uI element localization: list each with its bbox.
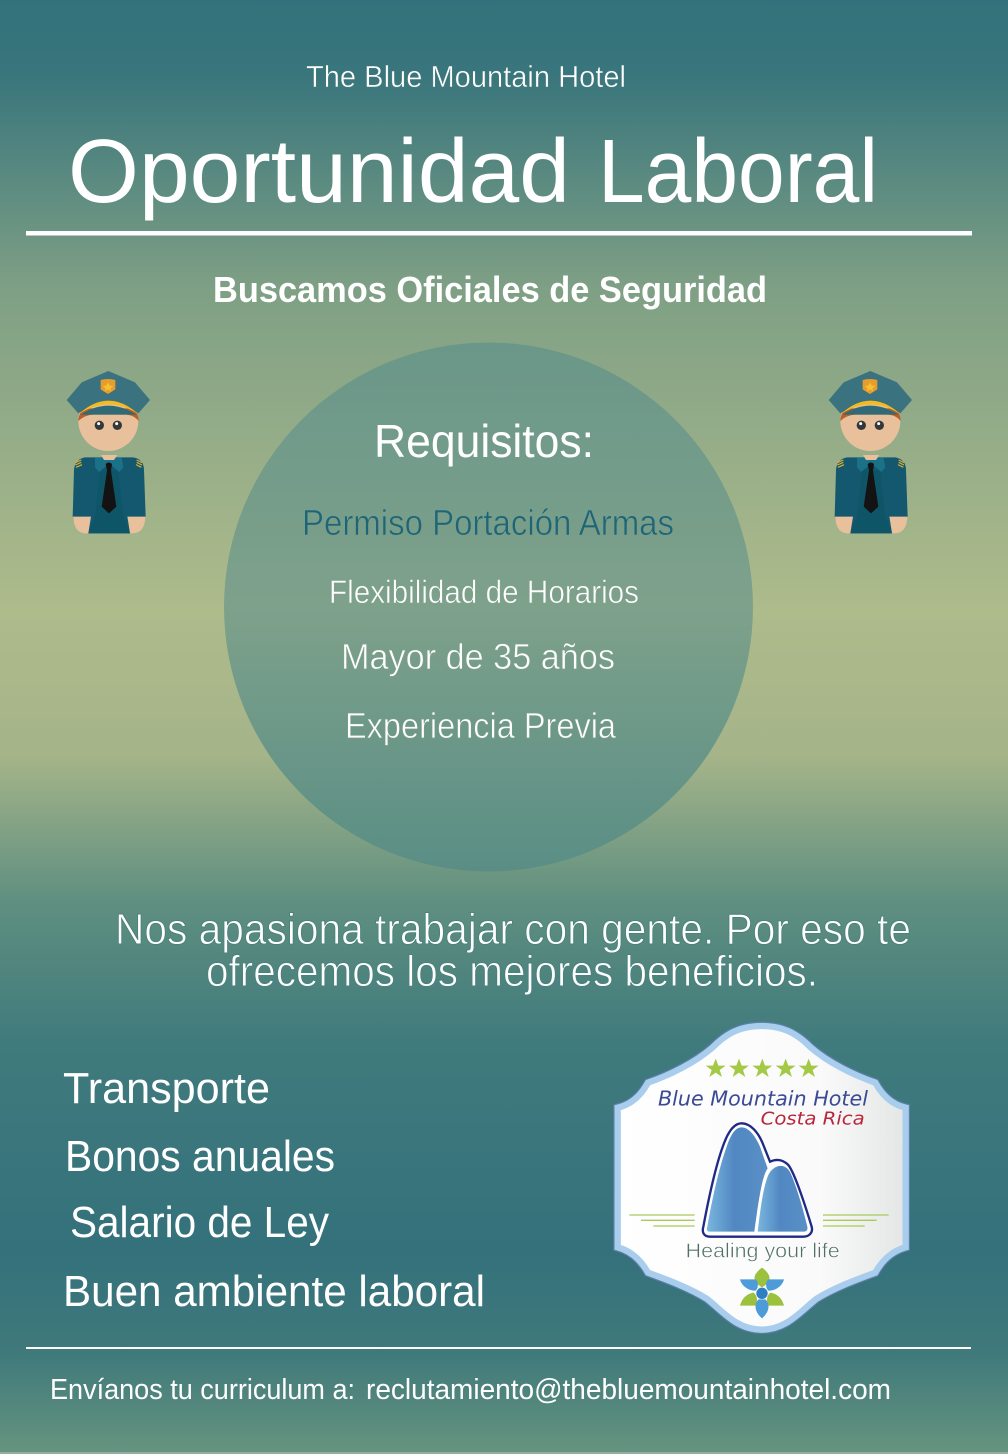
title xyxy=(68,122,878,222)
icon: officer left xyxy=(67,371,150,533)
requirement: edad: Mayor de 35 años xyxy=(341,636,615,677)
requisitos heading: Requisitos: xyxy=(374,415,594,467)
benefits statement: ofrecemos los mejores beneficios. xyxy=(206,947,818,996)
benefits list: Salario de Ley xyxy=(70,1198,329,1247)
contact line xyxy=(50,1374,891,1406)
benefits list: Buen ambiente laboral xyxy=(63,1267,485,1316)
icon: officer right xyxy=(829,371,912,533)
benefits statement: Nos apasiona trabajar con gente. Por eso te xyxy=(115,905,911,954)
benefits list xyxy=(63,1064,485,1316)
subtitle: Buscamos Oficiales de Seguridad xyxy=(213,269,767,310)
contact line: Envíanos tu curriculum a: xyxy=(50,1374,355,1406)
benefits list: Transporte xyxy=(63,1064,270,1113)
hotel name: The Blue Mountain Hotel xyxy=(306,59,626,94)
panel: requisitos circle xyxy=(224,342,753,872)
title: Oportunidad xyxy=(68,122,570,222)
logo name: Blue Mountain Hotel xyxy=(658,1086,868,1110)
decorative lines xyxy=(629,1215,889,1226)
requirement: permiso: Permiso Portación Armas xyxy=(302,502,674,543)
logo tagline: Healing your life xyxy=(686,1240,840,1263)
rating stars xyxy=(706,1059,819,1077)
logo location: Costa Rica xyxy=(761,1109,865,1129)
contact line: reclutamiento@thebluemountainhotel.com xyxy=(366,1374,891,1406)
benefits statement xyxy=(115,905,911,996)
logo badge xyxy=(618,1026,906,1330)
mountains xyxy=(703,1123,812,1237)
requirement: flexibilidad: Flexibilidad de Horarios xyxy=(329,574,639,610)
logo flower xyxy=(740,1268,784,1318)
requirement: experiencia: Experiencia Previa xyxy=(345,705,617,746)
benefits list: Bonos anuales xyxy=(65,1132,335,1181)
title: Laboral xyxy=(598,122,878,222)
